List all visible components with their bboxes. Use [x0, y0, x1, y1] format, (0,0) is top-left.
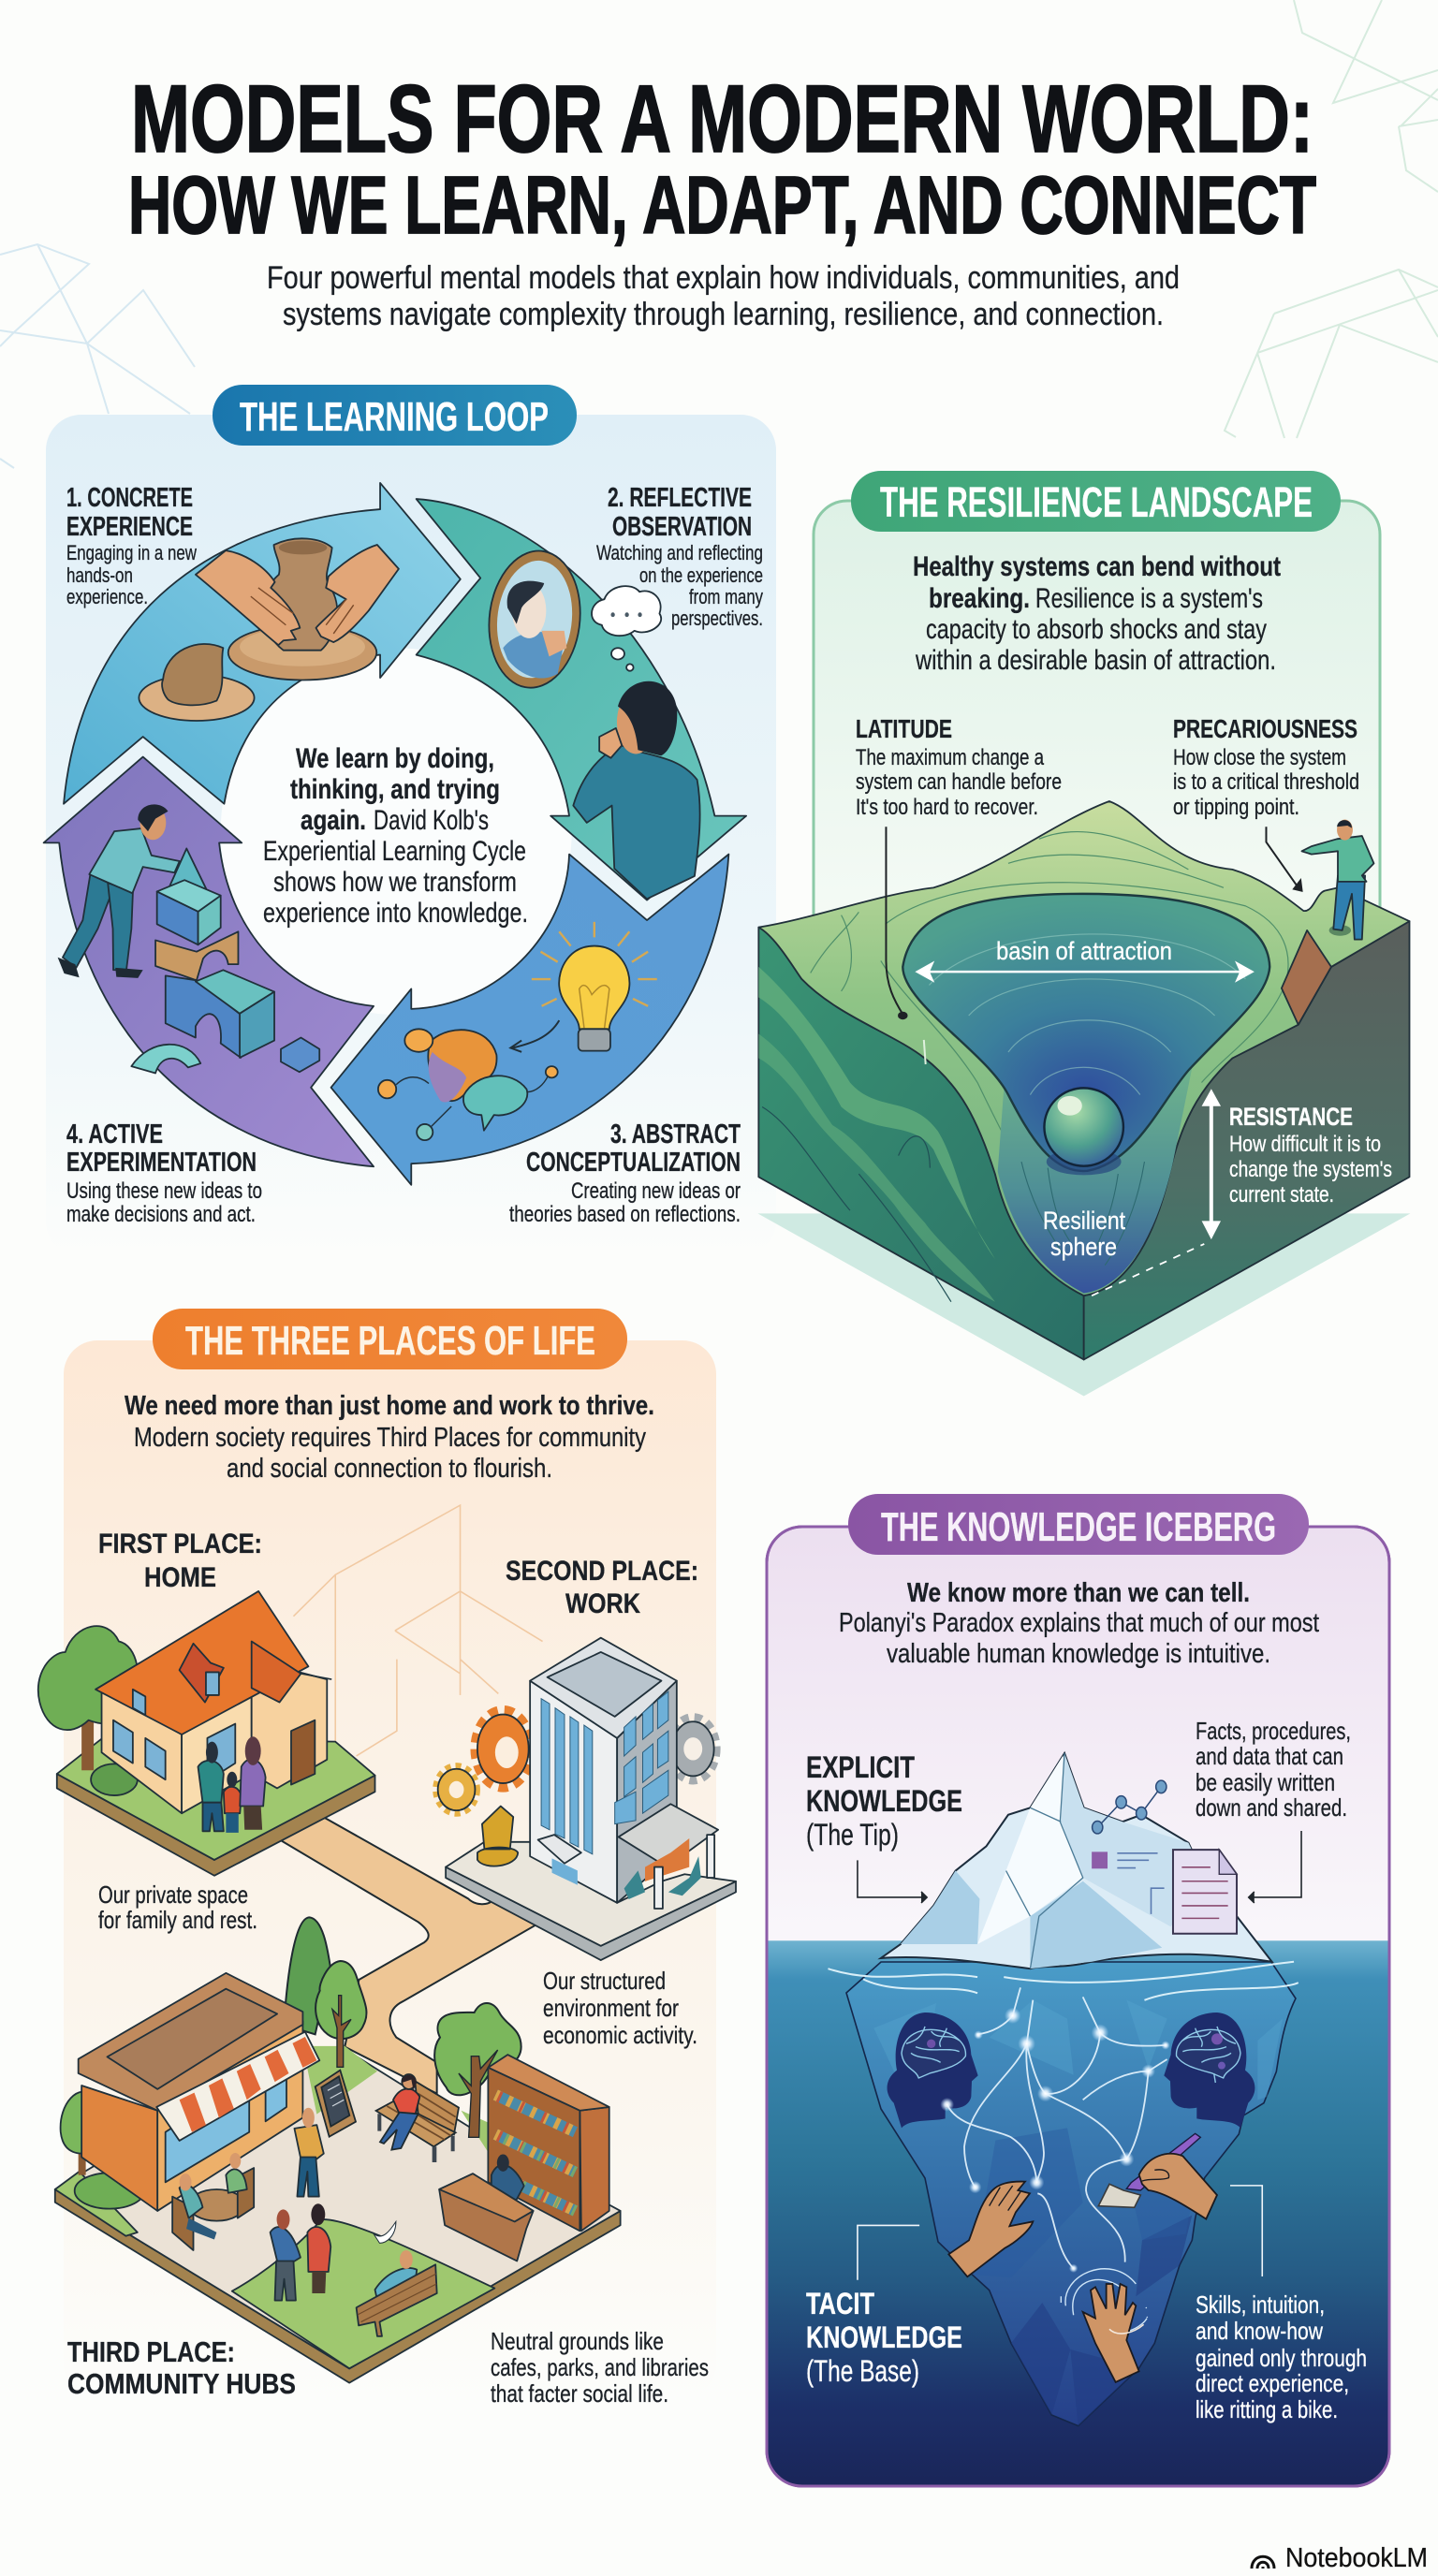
- text: second place description: environment for: [543, 1994, 679, 2022]
- label: basin of attraction: basin of attraction: [996, 937, 1172, 965]
- label: active experimentation: 4. ACTIVE: [66, 1120, 163, 1149]
- label: precariousness: is to a critical threshold: [1173, 769, 1359, 795]
- text: tacit description: [1196, 2291, 1367, 2423]
- heading: the knowledge iceberg: [848, 1494, 1309, 1555]
- first place: home: [38, 1591, 375, 1876]
- label: third place community hubs: [67, 2335, 296, 2400]
- cafe: [79, 1973, 319, 2250]
- label: abstract conceptualization: theories based on reflections.: [509, 1202, 741, 1227]
- label: active experimentation: make decisions and act.: [66, 1202, 256, 1227]
- text: iceberg summary: We know more than we can tell.: [907, 1578, 1250, 1608]
- text: first place description: [98, 1881, 257, 1934]
- panel: the three places of life: [38, 1309, 736, 2408]
- hand right with pen and paper: [1098, 2133, 1217, 2219]
- label: tacit knowledge: [806, 2287, 962, 2388]
- panel: the learning loop: [44, 385, 776, 1257]
- text: iceberg summary: Polanyi's Paradox explains that much of our most: [839, 1608, 1319, 1638]
- text: loop centre summary: experience into knowledge.: [263, 898, 528, 929]
- iceberg tip: [881, 1753, 1272, 1969]
- label: abstract conceptualization: [509, 1120, 741, 1227]
- arrow: resistance: [1202, 1090, 1220, 1238]
- text: three places summary: We need more than just home and work to thrive.: [125, 1391, 654, 1421]
- text: third place description: cafes, parks, and libraries: [491, 2353, 709, 2381]
- text: second place description: economic activity.: [543, 2021, 697, 2049]
- label: precariousness: or tipping point.: [1173, 795, 1299, 820]
- arrow: tacit right: [1230, 2186, 1262, 2276]
- icon: data bar lines: [1092, 1852, 1165, 1914]
- text: resilience summary: [913, 551, 1281, 676]
- text: loop centre summary: We learn by doing,: [296, 743, 494, 774]
- label: abstract conceptualization: 3. ABSTRACT: [610, 1120, 741, 1149]
- text: loop centre summary: shows how we transform: [273, 867, 517, 898]
- subtitle: Four powerful mental models that explain how individuals, communities, and: [267, 260, 1180, 296]
- arrow: latitude pointer: [886, 827, 926, 1064]
- text: explicit description: be easily written: [1196, 1768, 1335, 1796]
- label: explicit knowledge: KNOWLEDGE: [806, 1784, 962, 1818]
- text: loop centre summary: again.: [301, 805, 366, 836]
- label: concrete experience: Engaging in a new: [66, 541, 197, 564]
- basin of attraction: [902, 894, 1269, 1171]
- heading: the learning loop: THE LEARNING LOOP: [240, 394, 549, 440]
- arrow: explicit right: [1249, 1831, 1301, 1903]
- title: [128, 66, 1316, 251]
- underwater iceberg and scene: [846, 1962, 1296, 2426]
- text: iceberg summary: [839, 1578, 1319, 1669]
- path between places: [274, 1813, 538, 2094]
- label: resilient sphere: Resilient: [1043, 1207, 1125, 1235]
- icon: light bulb and ideas: [378, 922, 657, 1140]
- trees and bench at plaza: [284, 1917, 521, 2162]
- terrain block diagram: [757, 801, 1410, 1397]
- label: second place work: WORK: [565, 1588, 640, 1619]
- label: resistance: RESISTANCE: [1229, 1103, 1353, 1131]
- text: third place description: that facter social life.: [491, 2379, 668, 2408]
- icon: thinking person: [573, 681, 700, 899]
- label: concrete experience: 1. CONCRETE: [66, 483, 193, 513]
- label: first place home: [98, 1529, 262, 1593]
- label: tacit knowledge: (The Base): [806, 2354, 919, 2388]
- panel: the knowledge iceberg: [767, 1494, 1389, 2490]
- icon: mirror: [480, 543, 589, 695]
- label: latitude: The maximum change a: [856, 745, 1045, 770]
- cycle diagram: [44, 483, 746, 1185]
- text: explicit description: down and shared.: [1196, 1793, 1347, 1822]
- label: abstract conceptualization: CONCEPTUALIZATION: [526, 1148, 741, 1178]
- text: explicit description: Facts, procedures,: [1196, 1717, 1351, 1745]
- tree: right: [434, 2003, 521, 2137]
- librarian at desk: [439, 2154, 534, 2261]
- label: reflective observation: perspectives.: [671, 607, 763, 630]
- label: tacit knowledge: TACIT: [806, 2287, 874, 2320]
- contour lines: [811, 832, 1288, 1193]
- signboard: [315, 2071, 356, 2137]
- label: resilient sphere: sphere: [1050, 1233, 1117, 1261]
- label: resilient sphere: [1043, 1207, 1125, 1261]
- text: tacit description: and know-how: [1196, 2317, 1323, 2345]
- icon: document: [1173, 1850, 1237, 1934]
- arrow: tacit left: [858, 2225, 919, 2280]
- label: reflective observation: [596, 483, 763, 630]
- water: [767, 1940, 1389, 2490]
- bench with reader: [376, 2074, 459, 2162]
- icon: person stacking blocks: [58, 804, 319, 1073]
- label: first place home: HOME: [144, 1562, 216, 1593]
- family: [198, 1736, 266, 1833]
- label: concrete experience: EXPERIENCE: [66, 512, 193, 542]
- text: resilience summary: Healthy systems can bend without: [913, 551, 1281, 582]
- gears: [436, 1710, 716, 1866]
- text: second place description: [543, 1967, 697, 2049]
- label: latitude: LATITUDE: [856, 714, 952, 743]
- tree: tall: [284, 1917, 330, 2034]
- label: third place community hubs: THIRD PLACE:: [67, 2335, 235, 2368]
- label: explicit knowledge: EXPLICIT: [806, 1750, 915, 1784]
- text: third place description: Neutral grounds like: [491, 2327, 664, 2355]
- valley floor: [998, 1064, 1193, 1294]
- second place: work: [436, 1638, 736, 1960]
- subtitle: systems navigate complexity through learning, resilience, and connection.: [283, 297, 1164, 332]
- icon: data network: [1093, 1780, 1167, 1834]
- label: explicit knowledge: (The Tip): [806, 1818, 899, 1852]
- icon: thought bubble: [592, 586, 661, 671]
- label: active experimentation: Using these new ideas to: [66, 1178, 262, 1204]
- terrain surface: [758, 801, 1410, 1295]
- text: resilience summary: Resilience is a system's: [1035, 583, 1263, 614]
- panel: the resilience landscape: [757, 471, 1410, 1397]
- arrow: concrete experience: [64, 483, 461, 804]
- text: loop centre summary: thinking, and trying: [290, 774, 500, 805]
- label: latitude: It's too hard to recover.: [856, 795, 1038, 820]
- label: reflective observation: Watching and reflecting: [596, 541, 763, 564]
- glow nodes: [940, 2008, 1170, 2273]
- label: active experimentation: [66, 1120, 262, 1227]
- label: active experimentation: EXPERIMENTATION: [66, 1148, 257, 1178]
- label: third place community hubs: COMMUNITY HUBS: [67, 2367, 296, 2400]
- head silhouette right with brain: [1164, 2012, 1255, 2128]
- label: concrete experience: [66, 483, 197, 608]
- cafe patrons: [189, 2189, 244, 2221]
- label: resistance: change the system's: [1229, 1157, 1392, 1182]
- person walking: [294, 2108, 324, 2197]
- right cross-section face: [1084, 921, 1410, 1359]
- park bench with reader: [357, 2221, 437, 2336]
- label: latitude: [856, 714, 1062, 820]
- text: third place description: [491, 2327, 709, 2408]
- label: resistance: How difficult it is to: [1229, 1132, 1381, 1157]
- text: tacit description: like ritting a bike.: [1196, 2395, 1338, 2423]
- heading: the resilience landscape: [851, 471, 1341, 532]
- label: tacit knowledge: KNOWLEDGE: [806, 2320, 962, 2354]
- arrow: explicit left: [858, 1860, 927, 1903]
- iceberg tip diagram: [828, 1753, 1301, 2280]
- left cross-section face: [758, 928, 1084, 1359]
- label: reflective observation: OBSERVATION: [612, 512, 752, 542]
- third place: plaza ground: [55, 2046, 621, 2383]
- arrow: basin width: [916, 962, 1254, 982]
- arrow: reflective observation: [417, 499, 746, 900]
- text: first place description: for family and rest.: [98, 1906, 257, 1934]
- hand bottom with ripples: [1061, 2269, 1148, 2382]
- text: second place description: Our structured: [543, 1967, 666, 1995]
- isometric scene: third place features: [61, 1973, 609, 2336]
- text: three places summary: and social connection to flourish.: [227, 1454, 552, 1484]
- label: precariousness: [1173, 714, 1359, 820]
- heading: the knowledge iceberg: THE KNOWLEDGE ICEBERG: [881, 1504, 1276, 1550]
- arrow: active experimentation: [44, 757, 374, 1166]
- hand left: [948, 2182, 1033, 2276]
- heading: the learning loop: [213, 385, 577, 446]
- label: reflective observation: from many: [689, 585, 763, 608]
- icon: pottery hands: [139, 538, 399, 721]
- text: first place description: Our private space: [98, 1881, 248, 1909]
- text: three places summary: [125, 1391, 654, 1484]
- tree: round: [315, 1961, 366, 2067]
- text: resilience summary: capacity to absorb shocks and stay: [926, 614, 1267, 645]
- label: precariousness: PRECARIOUSNESS: [1173, 714, 1357, 743]
- text: tacit description: direct experience,: [1196, 2369, 1349, 2397]
- text: loop centre summary: David Kolb's: [374, 805, 489, 836]
- label: concrete experience: experience.: [66, 585, 148, 608]
- label: concrete experience: hands-on: [66, 564, 133, 587]
- label: latitude: system can handle before: [856, 769, 1062, 795]
- arrow: precariousness pointer: [1266, 827, 1302, 891]
- person on tipping point: [1302, 820, 1373, 940]
- small trees by cafe: [61, 2092, 144, 2209]
- neural light paths: [947, 1987, 1167, 2268]
- talking couple: [271, 2203, 330, 2301]
- text: resilience summary: within a desirable basin of attraction.: [915, 645, 1276, 676]
- text: iceberg summary: valuable human knowledge is intuitive.: [887, 1639, 1270, 1669]
- arrow: abstract conceptualization: [331, 855, 728, 1185]
- isometric scene: [38, 1591, 736, 2383]
- subtitle: [267, 260, 1180, 332]
- text: tacit description: Skills, intuition,: [1196, 2291, 1325, 2319]
- resilient sphere: [1044, 1088, 1123, 1175]
- heading: the three places of life: THE THREE PLACES OF LIFE: [185, 1318, 595, 1364]
- label: resistance: [1229, 1103, 1392, 1208]
- label: resistance: current state.: [1229, 1182, 1334, 1208]
- text: explicit description: [1196, 1717, 1351, 1822]
- heading: the three places of life: [153, 1309, 627, 1369]
- label: second place work: [506, 1556, 698, 1619]
- label: reflective observation: 2. REFLECTIVE: [608, 483, 752, 513]
- label: second place work: SECOND PLACE:: [506, 1556, 698, 1587]
- submerged berg: [846, 1962, 1296, 2426]
- text: tacit description: gained only through: [1196, 2344, 1367, 2372]
- text: explicit description: and data that can: [1196, 1742, 1343, 1770]
- head silhouette left with brain: [888, 2012, 978, 2128]
- label: precariousness: How close the system: [1173, 745, 1346, 770]
- bookshelf: [488, 2055, 609, 2231]
- text: loop centre summary: Experiential Learning Cycle: [263, 836, 526, 867]
- label: abstract conceptualization: Creating new ideas or: [571, 1178, 741, 1204]
- text: loop centre summary: [263, 743, 528, 929]
- cliff edge: [1282, 930, 1331, 1025]
- faint blueprint lines: [293, 1505, 543, 1756]
- text: three places summary: Modern society requires Third Places for community: [134, 1423, 646, 1453]
- logo: NotebookLM: NotebookLM: [1285, 2543, 1428, 2573]
- label: reflective observation: on the experience: [639, 564, 763, 587]
- label: first place home: FIRST PLACE:: [98, 1529, 262, 1559]
- text: resilience summary: breaking.: [929, 583, 1030, 614]
- tree: [38, 1626, 138, 1770]
- label: explicit knowledge: [806, 1750, 962, 1852]
